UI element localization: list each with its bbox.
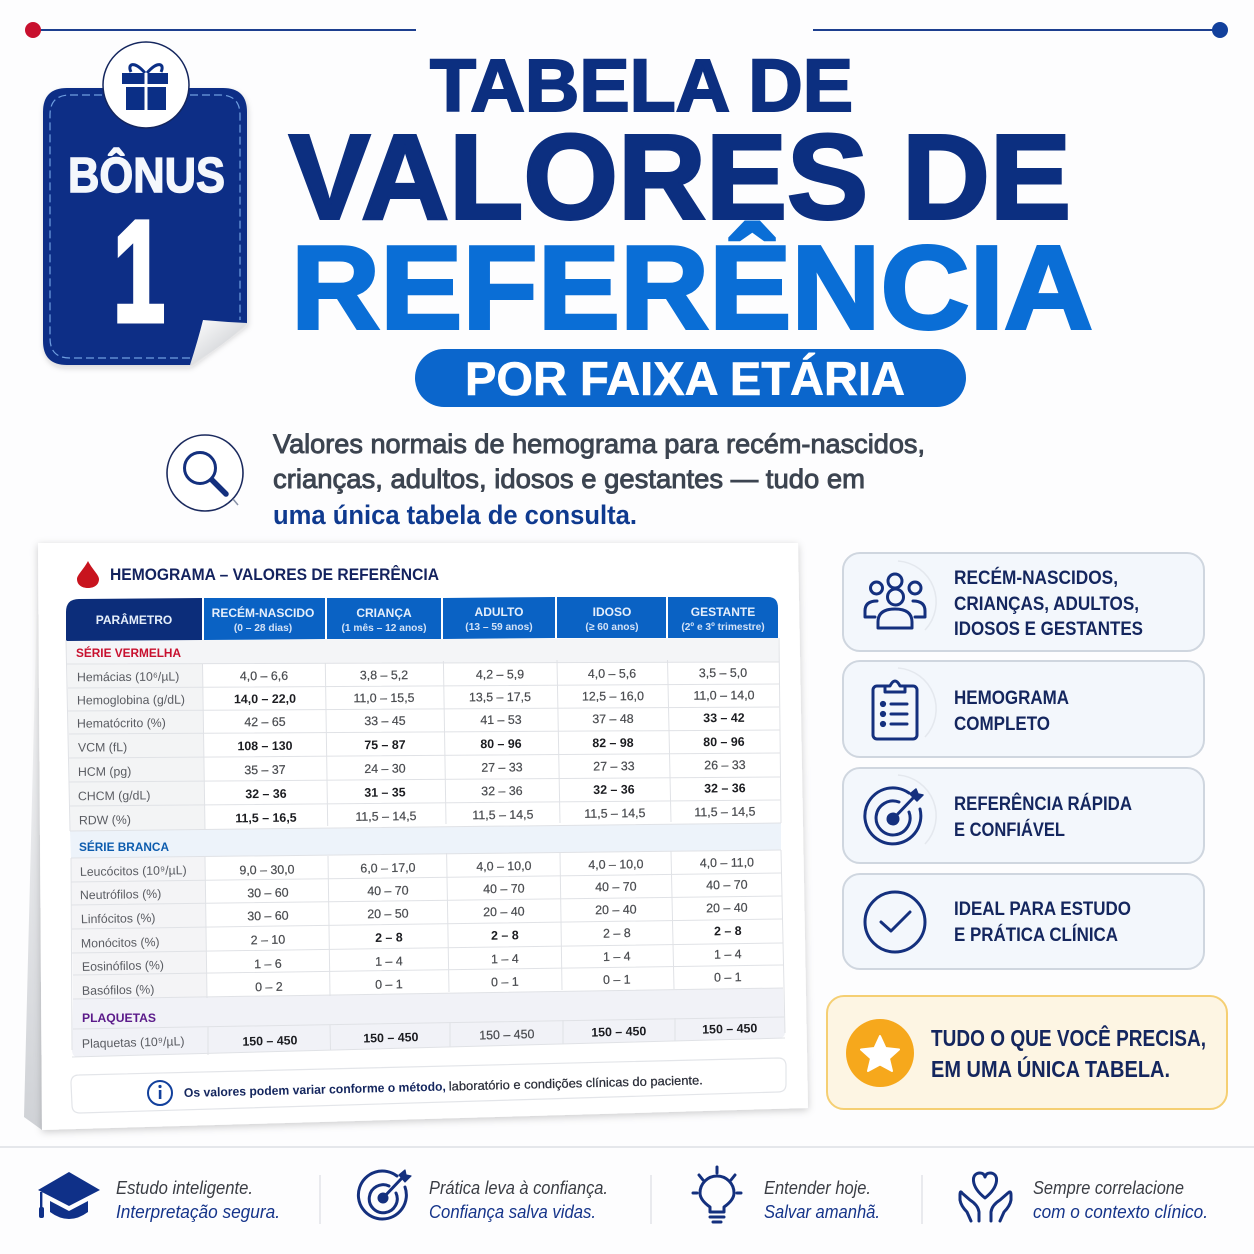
- icon: magnifier: [167, 435, 243, 511]
- icon: gift in circle: [103, 42, 189, 128]
- row: hematocrito: 33 – 42: [703, 711, 745, 725]
- row: linfocitos: 20 – 40: [483, 905, 525, 919]
- table header row: (0 – 28 dias): [234, 623, 292, 634]
- row: monocitos: 2 – 8: [491, 928, 519, 943]
- row: rdw: 11,5 – 16,5: [235, 811, 297, 825]
- row: rdw: [79, 805, 756, 827]
- badge: bonus 1: [43, 42, 247, 365]
- row: hemacias: 3,5 – 5,0: [699, 666, 747, 680]
- row: neutrofilos: 40 – 70: [706, 878, 748, 892]
- row: hemoglobina: 11,0 – 14,0: [693, 688, 755, 703]
- row: linfocitos: [81, 901, 748, 926]
- title: [289, 44, 1093, 354]
- row: vcm: 80 – 96: [703, 735, 745, 749]
- row: hcm: 26 – 33: [704, 758, 746, 772]
- row: monocitos: Monócitos (%): [81, 935, 160, 951]
- card text: IDOSOS E GESTANTES: [954, 619, 1143, 640]
- row: hematocrito: [77, 711, 745, 731]
- row: rdw: 11,5 – 14,5: [694, 805, 756, 819]
- table header row: (1 mês – 12 anos): [342, 623, 426, 634]
- row: plaquetas: 150 – 450: [591, 1024, 647, 1040]
- card text: CRIANÇAS, ADULTOS,: [954, 594, 1139, 615]
- row: chcm: 32 – 36: [593, 782, 635, 797]
- callout text: EM UMA ÚNICA TABELA.: [931, 1055, 1170, 1082]
- icon: target: [358, 1170, 411, 1219]
- icon: blood drop: [77, 561, 99, 588]
- row: basofilos: 0 – 1: [603, 972, 631, 987]
- row: vcm: 82 – 98: [592, 736, 634, 750]
- row: hcm: 27 – 33: [593, 759, 635, 774]
- row: hematocrito: 33 – 45: [364, 714, 406, 728]
- footer text: Entender hoje.: [764, 1178, 871, 1198]
- section label: serie vermelha: SÉRIE VERMELHA: [76, 645, 181, 660]
- icon: heart in hands: [960, 1173, 1011, 1221]
- row: basofilos: 0 – 2: [255, 980, 283, 994]
- row: vcm: [78, 735, 745, 755]
- row: hemacias: 4,0 – 6,6: [240, 669, 288, 683]
- card text: [954, 793, 1132, 841]
- table header row: (2º e 3º trimestre): [681, 622, 765, 633]
- icon: star: [846, 1019, 914, 1087]
- footer text: [764, 1178, 880, 1222]
- footer item: study: [38, 1172, 280, 1222]
- table heading: HEMOGRAMA – VALORES DE REFERÊNCIA: [110, 565, 439, 584]
- row: hcm: 35 – 37: [244, 763, 286, 777]
- row: rdw: 11,5 – 14,5: [584, 806, 646, 821]
- card text: E CONFIÁVEL: [954, 819, 1065, 841]
- row: hematocrito: 41 – 53: [480, 713, 522, 727]
- table header row: CRIANÇA: [356, 606, 412, 620]
- row: hemacias: Hemácias (10⁶/µL): [77, 670, 179, 684]
- top rule left with red dot: [25, 22, 416, 38]
- badge word: BÔNUS: [68, 148, 225, 203]
- footer text: [116, 1178, 280, 1222]
- card text: [954, 688, 1069, 735]
- panel: reference table sheet: [24, 543, 808, 1130]
- footer text: [429, 1178, 608, 1222]
- card text: [954, 567, 1143, 640]
- row: rdw: 11,5 – 14,5: [355, 809, 417, 824]
- icon: clipboard: [873, 681, 917, 739]
- table header row: (13 – 59 anos): [465, 622, 533, 633]
- row: neutrofilos: Neutrófilos (%): [80, 887, 161, 902]
- icon: info: [148, 1081, 172, 1105]
- icon: target: [865, 788, 923, 844]
- table header row: PARÂMETRO: [96, 612, 172, 627]
- table header row: ADULTO: [475, 605, 523, 619]
- title: REFERÊNCIA: [291, 222, 1093, 354]
- subtitle text: uma única tabela de consulta.: [273, 500, 637, 530]
- row: hemoglobina: Hemoglobina (g/dL): [77, 693, 185, 707]
- row: leucocitos: Leucócitos (10⁹/µL): [80, 863, 187, 879]
- row: hematocrito: 37 – 48: [592, 712, 634, 726]
- table grid: [66, 638, 785, 1057]
- row: eosinofilos: 1 – 4: [714, 947, 742, 962]
- badge number: 1: [113, 191, 165, 352]
- row: monocitos: 2 – 10: [251, 933, 285, 947]
- row: hemoglobina: 14,0 – 22,0: [234, 692, 296, 706]
- top rule right with blue dot: [813, 22, 1228, 38]
- table header row: GESTANTE: [691, 605, 755, 619]
- card text: REFERÊNCIA RÁPIDA: [954, 793, 1132, 815]
- row: plaquetas: [82, 1019, 758, 1053]
- row: hematocrito: Hematócrito (%): [77, 716, 166, 731]
- card: quick reference: [843, 768, 1204, 863]
- card: complete blood count: [843, 661, 1204, 757]
- row: vcm: 80 – 96: [480, 737, 522, 751]
- footer item: understand: [693, 1167, 880, 1222]
- row: vcm: VCM (fL): [78, 740, 127, 755]
- footer item: practice: [358, 1170, 608, 1222]
- row: basofilos: 0 – 1: [375, 977, 403, 992]
- row: vcm: 108 – 130: [237, 739, 293, 753]
- row: hcm: 27 – 33: [481, 760, 523, 775]
- row: hemacias: 3,8 – 5,2: [360, 668, 408, 682]
- table header row: [66, 597, 778, 641]
- row: hemoglobina: 12,5 – 16,0: [582, 689, 644, 704]
- row: linfocitos: 20 – 50: [367, 907, 409, 921]
- footer text: Sempre correlacione: [1033, 1178, 1184, 1198]
- callout text: TUDO O QUE VOCÊ PRECISA,: [931, 1024, 1206, 1051]
- card text: COMPLETO: [954, 714, 1050, 735]
- icon: light bulb: [693, 1167, 741, 1222]
- row: eosinofilos: 1 – 4: [603, 949, 631, 964]
- icon: graduation cap: [38, 1172, 100, 1219]
- footer text: Salvar amanhã.: [764, 1202, 880, 1222]
- row: hemoglobina: 13,5 – 17,5: [469, 690, 531, 704]
- table header row: (≥ 60 anos): [585, 622, 639, 633]
- table backgrounds: [66, 638, 785, 1057]
- row: hemacias: 4,2 – 5,9: [476, 667, 524, 682]
- row: eosinofilos: Eosinófilos (%): [82, 958, 164, 974]
- card: study and practice: [843, 874, 1204, 969]
- row: neutrofilos: 40 – 70: [367, 884, 409, 898]
- row: leucocitos: [80, 854, 754, 880]
- row: hemacias: [77, 666, 747, 684]
- row: rdw: RDW (%): [79, 813, 131, 827]
- row: linfocitos: 20 – 40: [595, 903, 637, 917]
- row: leucocitos: 6,0 – 17,0: [360, 861, 416, 876]
- card text: [954, 899, 1131, 946]
- icon: check circle: [865, 892, 925, 952]
- card text: IDEAL PARA ESTUDO: [954, 899, 1131, 920]
- row: hemoglobina: 11,0 – 15,5: [353, 691, 415, 705]
- row: plaquetas: 150 – 450: [363, 1030, 419, 1046]
- row: plaquetas: Plaquetas (10⁹/µL): [82, 1034, 185, 1051]
- row: hcm: [78, 758, 746, 779]
- row: chcm: 32 – 36: [704, 781, 746, 796]
- row: hemacias: 4,0 – 5,6: [588, 667, 636, 681]
- footer text: com o contexto clínico.: [1033, 1202, 1208, 1222]
- row: hcm: 24 – 30: [364, 762, 406, 776]
- row: neutrofilos: 40 – 70: [595, 880, 637, 894]
- row: eosinofilos: 1 – 6: [254, 957, 282, 971]
- note text: laboratório e condições clínicas do paciente.: [449, 1073, 703, 1094]
- title: VALORES DE: [289, 108, 1071, 244]
- row: basofilos: 0 – 1: [714, 970, 742, 985]
- pill: por faixa etária: POR FAIXA ETÁRIA: [465, 352, 905, 405]
- card text: HEMOGRAMA: [954, 688, 1069, 709]
- row: basofilos: 0 – 1: [491, 975, 519, 989]
- card: age groups: [843, 553, 1204, 651]
- footer text: Interpretação segura.: [116, 1202, 280, 1222]
- callout text: [931, 1024, 1206, 1082]
- row: hemoglobina: [77, 688, 755, 707]
- note text: Os valores podem variar conforme o método,: [184, 1080, 446, 1100]
- row: monocitos: 2 – 8: [375, 930, 403, 945]
- row: neutrofilos: [80, 877, 748, 903]
- row: plaquetas: 150 – 450: [242, 1033, 298, 1049]
- title: TABELA DE: [430, 44, 853, 127]
- row: vcm: 75 – 87: [364, 738, 406, 752]
- row: chcm: CHCM (g/dL): [78, 788, 150, 803]
- footer text: Estudo inteligente.: [116, 1178, 253, 1198]
- row: chcm: 32 – 36: [245, 787, 287, 801]
- row: hematocrito: 42 – 65: [244, 715, 286, 729]
- table header row: IDOSO: [593, 605, 631, 619]
- note text: [184, 1073, 703, 1100]
- row: monocitos: [81, 924, 742, 951]
- row: chcm: 31 – 35: [364, 785, 406, 800]
- row: eosinofilos: 1 – 4: [491, 952, 519, 966]
- footer text: Confiança salva vidas.: [429, 1202, 596, 1222]
- page curl: [190, 320, 247, 365]
- subtitle text: crianças, adultos, idosos e gestantes — tudo em: [273, 464, 865, 494]
- icon: people: [865, 574, 925, 628]
- callout: everything in one table: [827, 996, 1227, 1109]
- row: eosinofilos: 1 – 4: [375, 954, 403, 969]
- row: eosinofilos: [82, 946, 742, 975]
- row: leucocitos: 4,0 – 10,0: [588, 857, 644, 872]
- row: plaquetas: 150 – 450: [702, 1021, 758, 1037]
- row: chcm: 32 – 36: [481, 784, 523, 798]
- card text: RECÉM-NASCIDOS,: [954, 567, 1118, 589]
- row: chcm: [78, 781, 746, 803]
- row: basofilos: [82, 970, 742, 998]
- row: leucocitos: 4,0 – 11,0: [700, 855, 754, 870]
- row: monocitos: 2 – 8: [714, 924, 742, 938]
- row: basofilos: Basófilos (%): [82, 982, 155, 998]
- section label: serie branca: SÉRIE BRANCA: [79, 839, 169, 854]
- footer text: [1033, 1178, 1208, 1222]
- footer item: correlate: [960, 1173, 1208, 1222]
- row: linfocitos: 30 – 60: [247, 909, 289, 923]
- row: linfocitos: 20 – 40: [706, 901, 748, 915]
- row: monocitos: 2 – 8: [603, 926, 631, 941]
- row: hcm: HCM (pg): [78, 764, 131, 779]
- footer text: Prática leva à confiança.: [429, 1178, 608, 1198]
- table header row: RECÉM-NASCIDO: [212, 605, 314, 620]
- subtitle text: [273, 429, 925, 530]
- row: plaquetas: 150 – 450: [479, 1027, 535, 1043]
- card text: E PRÁTICA CLÍNICA: [954, 924, 1118, 946]
- row: linfocitos: Linfócitos (%): [81, 911, 156, 926]
- row: rdw: 11,5 – 14,5: [472, 807, 534, 822]
- row: leucocitos: 4,0 – 10,0: [476, 859, 532, 874]
- row: leucocitos: 9,0 – 30,0: [239, 863, 295, 877]
- note box: [71, 1058, 786, 1113]
- row: neutrofilos: 40 – 70: [483, 882, 525, 896]
- subtitle text: Valores normais de hemograma para recém-nascidos,: [273, 429, 925, 459]
- row: neutrofilos: 30 – 60: [247, 886, 289, 900]
- section label: plaquetas: PLAQUETAS: [82, 1011, 156, 1025]
